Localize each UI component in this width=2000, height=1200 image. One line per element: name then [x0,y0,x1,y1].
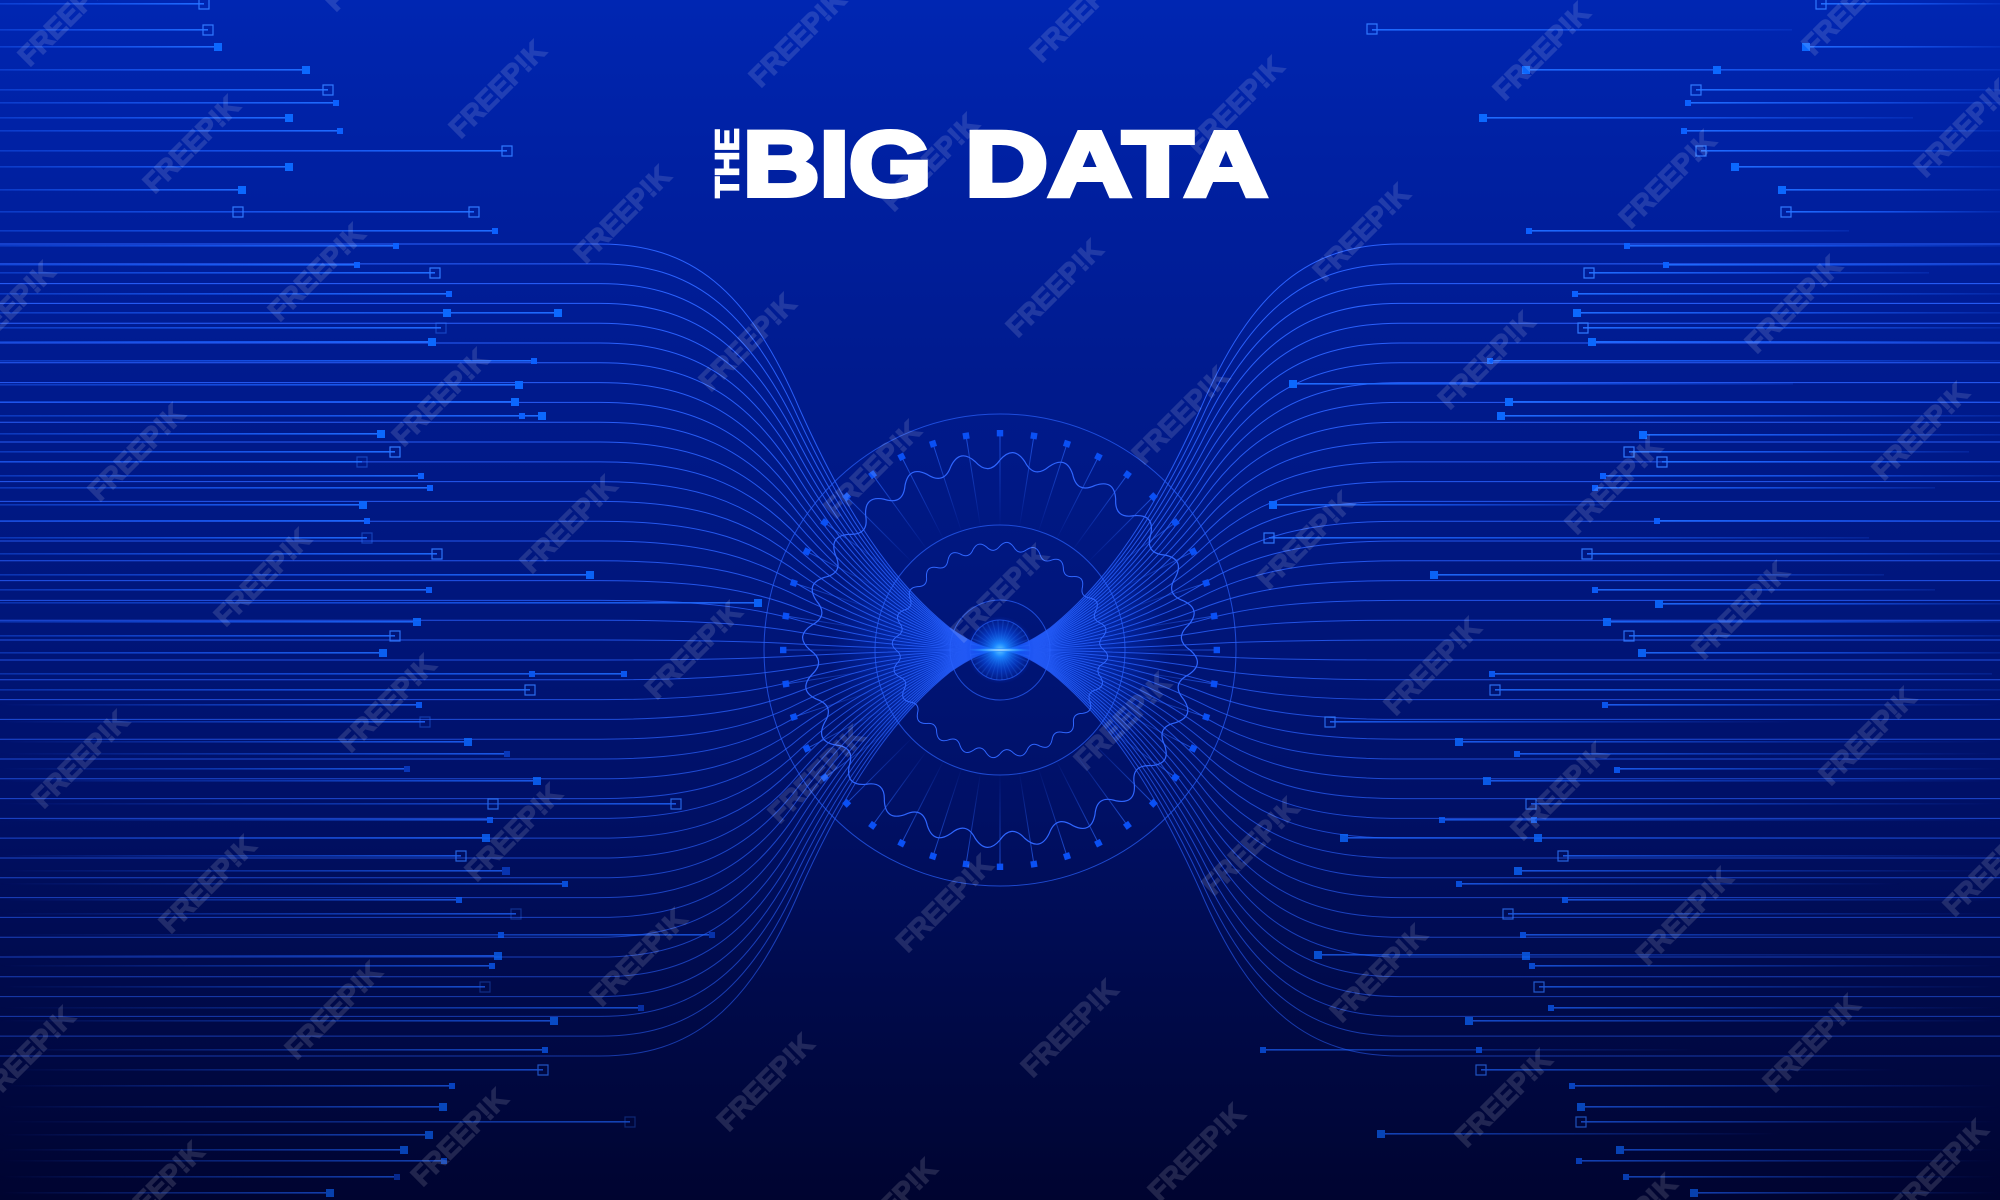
watermarks: FREEP!K [386,343,495,452]
watermarks: FREEP!K [1181,51,1290,160]
watermarks: FREEP!K [1432,306,1541,415]
watermarks: FREEP!K [1307,178,1416,287]
data lines left [0,0,762,1197]
watermarks: FREEP!K [1630,862,1739,971]
title: THE [708,128,746,198]
watermarks: FREEP!K [711,1028,820,1137]
radial ticks with square nodes [780,430,1220,870]
watermarks: FREEP!K [153,830,262,939]
watermarks: FREEP!K [876,108,985,217]
watermarks: FREEP!K [1813,682,1922,791]
watermarks: FREEP!K [514,470,623,579]
watermarks: FREEP!K [1613,125,1722,234]
watermarks: FREEP!K [262,218,371,327]
watermarks: FREEP!K [279,956,388,1065]
watermarks: FREEP!K [1251,486,1360,595]
watermarks: FREEP!K [762,720,871,829]
title [708,114,1268,216]
watermarks: FREEP!K [1505,737,1614,846]
watermarks: FREEP!K [405,1083,514,1192]
watermarks: FREEP!K [1686,556,1795,665]
watermarks: FREEP!K [890,849,999,958]
watermarks: FREEP!K [1559,431,1668,540]
watermarks: FREEP!K [1739,250,1848,359]
watermarks: FREEP!K [818,415,927,524]
watermarks: FREEP!K [1196,792,1305,901]
watermarks: FREEP!K [1487,0,1596,106]
outer wavy ring [797,447,1203,853]
watermarks: FREEP!K [1449,1044,1558,1153]
title: DATA [965,114,1268,216]
watermarks: FREEP!K [1378,612,1487,721]
watermarks: FREEP!K [1000,234,1109,343]
central glow [966,616,1034,684]
central radial diagram [764,414,1236,886]
inner wavy ring [889,539,1111,761]
watermarks: FREEP!K [208,523,317,632]
title: BIG [743,114,932,216]
watermarks: FREEP!K [1757,989,1866,1098]
watermarks: FREEP!K [137,90,246,199]
watermarks: FREEP!K [945,539,1054,648]
watermarks: FREEP!K [693,288,802,397]
converging curve lines [0,244,2000,1056]
watermarks: FREEP!K [26,705,135,814]
watermarks: FREEP!K [584,903,693,1012]
watermarks: FREEP!K [333,649,442,758]
watermarks: FREEP!K [1015,974,1124,1083]
watermarks: FREEP!K [443,35,552,144]
watermarks: FREEP!K [639,596,748,705]
watermarks: FREEP!K [1324,919,1433,1028]
watermarks: FREEP!K [82,398,191,507]
bow-tie fill at centre [800,410,1200,890]
watermarks: FREEP!K [459,778,568,887]
watermarks: FREEP!K [568,160,677,269]
data lines right [1260,0,2000,1197]
watermarks: FREEP!K [1068,667,1177,776]
concentric circles [764,414,1236,886]
watermarks: FREEP!K [1866,377,1975,486]
watermarks: FREEP!K [1126,361,1235,470]
